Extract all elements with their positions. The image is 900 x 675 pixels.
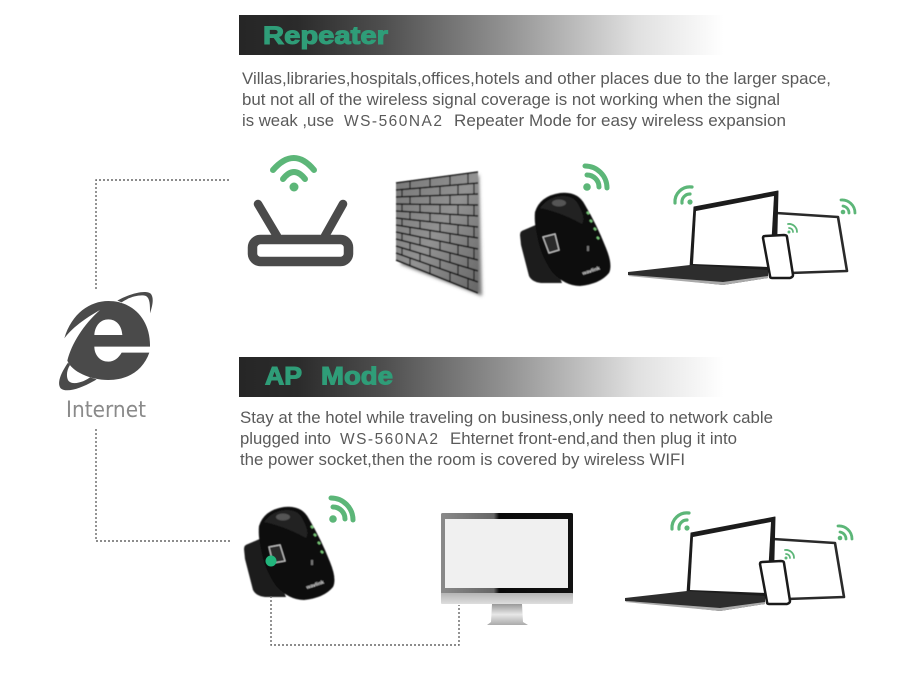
- icon: repeater device: [520, 193, 610, 286]
- wifi: tablet outside: [841, 200, 855, 214]
- icon: Internet logo: [59, 292, 153, 390]
- icon: repeater device: wavlink: [581, 266, 601, 277]
- wifi: tablet inside: [784, 550, 794, 560]
- laptop base: [628, 265, 768, 285]
- banner: Repeater heading: [239, 15, 724, 55]
- wifi: tablet outside: [838, 526, 852, 540]
- wifi: tablet inside: [788, 224, 797, 234]
- dotted line: internet to router: [96, 180, 229, 290]
- laptop screen: [687, 517, 775, 596]
- icon: laptop, tablet and phone: [628, 187, 855, 285]
- icon: desktop monitor: [441, 513, 573, 625]
- phone: [760, 561, 790, 604]
- text block: Repeater description: [242, 69, 831, 130]
- icon: AP device: [244, 507, 334, 600]
- text block: AP Mode description: WS-560NA2: [340, 431, 438, 448]
- dotted line: internet to AP device: [96, 429, 232, 541]
- dotted line: AP device to monitor: [271, 596, 459, 645]
- text block: Repeater description: but not all of the wireless signal coverage is not working when the signal: [242, 90, 780, 109]
- icon: laptop, tablet and phone (AP): [625, 513, 852, 611]
- wifi: laptop: [672, 513, 690, 531]
- banner: Repeater heading: Repeater: [263, 22, 388, 50]
- image: brick wall: [396, 172, 482, 296]
- text block: AP Mode description: the power socket,then the room is covered by wireless WIFI: [240, 450, 685, 469]
- text block: Repeater description: WS-560NA2: [344, 113, 442, 130]
- label: Internet: Internet: [66, 398, 146, 423]
- text block: AP Mode description: plugged into: [240, 429, 331, 448]
- wifi: laptop: [675, 187, 693, 205]
- icon: router with wifi: [252, 158, 348, 262]
- icon: AP device: wavlink: [305, 580, 325, 591]
- text block: Repeater description: is weak ,use: [242, 111, 334, 130]
- tablet: [773, 539, 844, 599]
- text block: AP Mode description: Ehternet front-end,and then plug it into: [450, 429, 737, 448]
- banner: AP Mode heading: Mode: [321, 362, 393, 390]
- icon: Ethernet port highlight: [266, 556, 276, 566]
- laptop base: [625, 591, 765, 611]
- banner: AP Mode heading: [239, 357, 724, 397]
- icon: repeater wifi signal: [583, 166, 607, 191]
- text block: AP Mode description: [240, 408, 773, 469]
- text block: Repeater description: Repeater Mode for easy wireless expansion: [454, 111, 786, 130]
- icon: AP wifi signal: [329, 498, 353, 523]
- text block: Repeater description: Villas,libraries,hospitals,offices,hotels and other places due to the larger space,: [242, 69, 831, 88]
- phone: [763, 235, 793, 278]
- laptop screen: [690, 191, 778, 270]
- text block: AP Mode description: Stay at the hotel while traveling on business,only need to network cable: [240, 408, 773, 427]
- banner: AP Mode heading: AP: [265, 362, 302, 390]
- tablet: [776, 213, 847, 273]
